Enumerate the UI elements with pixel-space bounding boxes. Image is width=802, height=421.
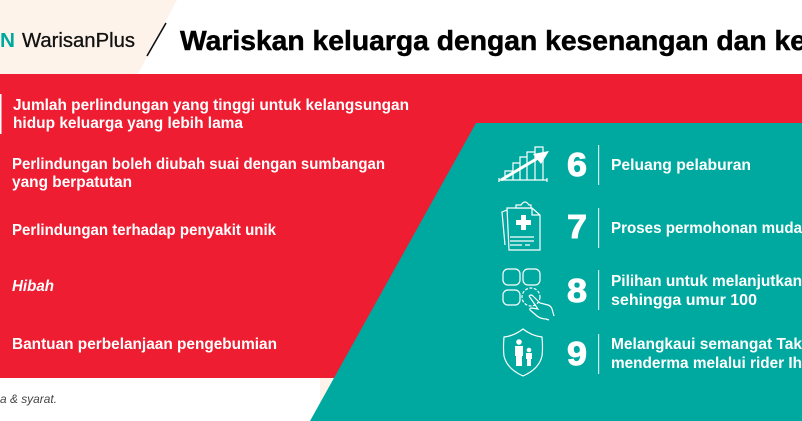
benefit 1 text (13, 97, 409, 132)
benefit 2 text (12, 156, 385, 191)
benefit 5 text: Bantuan perbelanjaan pengebumian (12, 336, 277, 353)
logo: N (0, 30, 15, 52)
footnote: a & syarat. (0, 394, 57, 406)
divider 6 (598, 145, 599, 185)
label 9 (611, 336, 802, 372)
benefit 2 text: yang berpatutan (12, 174, 132, 191)
logo: WarisanPlus (22, 30, 135, 52)
divider 9 (598, 334, 599, 374)
label 9: Melangkaui semangat Tak (611, 336, 802, 353)
benefit 1 text: Jumlah perlindungan yang tinggi untuk kelangsungan (13, 97, 409, 114)
label 7: Proses permohonan muda (611, 220, 802, 237)
number 6: 6 (567, 146, 587, 183)
icon: touch selection grid (503, 269, 554, 320)
divider 8 (598, 270, 599, 310)
number 8: 8 (567, 272, 587, 309)
beige logo panel (0, 0, 177, 74)
icon: growth chart (499, 147, 549, 182)
left marker (0, 94, 2, 134)
benefit 1 text: hidup keluarga yang lebih lama (13, 115, 243, 132)
icon: medical clipboard (502, 202, 540, 250)
label 8 (611, 273, 802, 309)
benefit 2 text: Perlindungan boleh diubah suai dengan sumbangan (12, 156, 385, 173)
header background (0, 0, 802, 74)
number 7: 7 (567, 208, 587, 245)
slash divider (147, 23, 166, 56)
panel: red benefits (0, 74, 802, 378)
label 6: Peluang pelaburan (611, 157, 751, 174)
divider 7 (598, 208, 599, 248)
panel: teal benefits (310, 123, 802, 421)
label 8: sehingga umur 100 (611, 292, 757, 309)
label 9: menderma melalui rider Ih (611, 355, 802, 372)
benefit 4 text: Hibah (12, 278, 54, 295)
beige footer sliver (320, 378, 350, 421)
title: Wariskan keluarga dengan kesenangan dan ke (180, 25, 802, 56)
benefit 3 text: Perlindungan terhadap penyakit unik (12, 222, 276, 239)
label 8: Pilihan untuk melanjutkan (611, 273, 802, 290)
icon: family shield (504, 329, 542, 376)
number 9: 9 (567, 335, 587, 372)
